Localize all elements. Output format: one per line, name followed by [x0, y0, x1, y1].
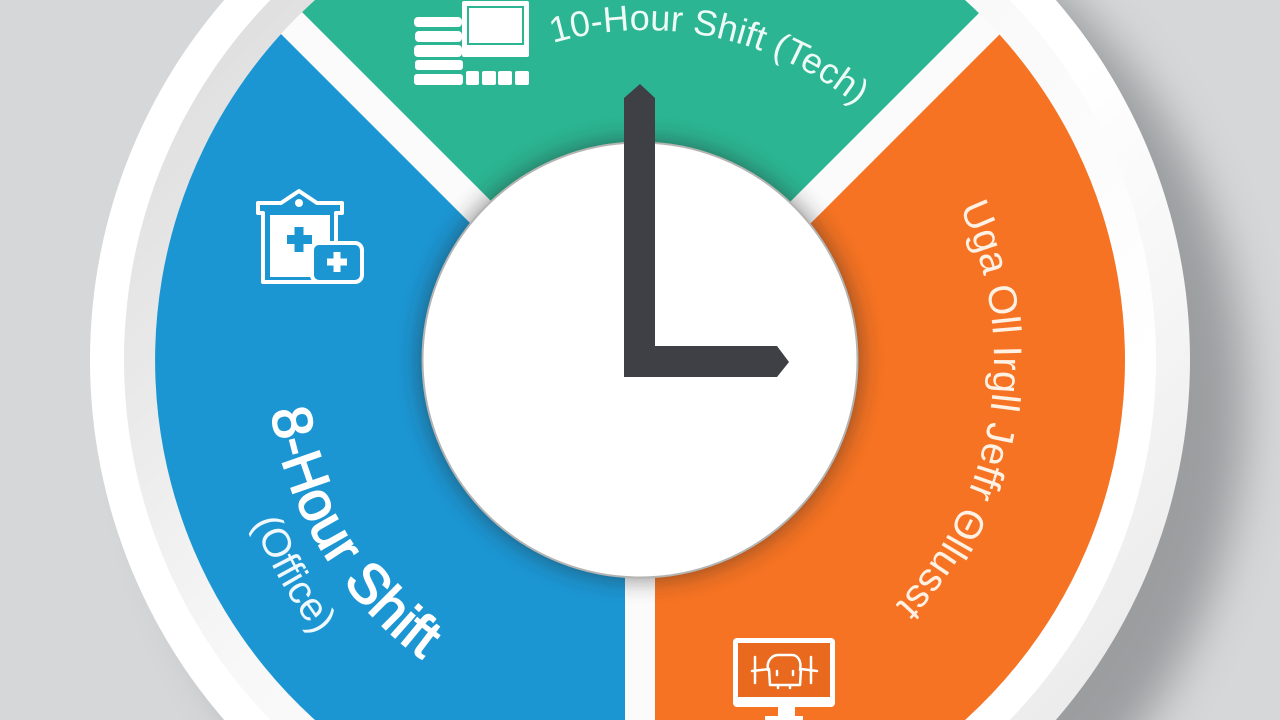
center disc shadow — [418, 138, 862, 582]
segment: blue office shift — [155, 34, 625, 720]
label: 10-hour shift tech: 10-Hour Shift (Tech) — [551, 6, 866, 106]
clock hands — [624, 84, 789, 377]
segment: orange hospital shift — [655, 34, 1125, 720]
icon: tech workstation — [414, 1, 529, 85]
segment: green tech shift — [302, 0, 979, 351]
label: garbled orange shift text: Uga Oll Irgll Jeffr Θllusst — [896, 199, 1022, 620]
label: 8-hour shift: 8-Hour Shift — [272, 407, 441, 660]
icon: hospital clipboard — [258, 191, 362, 282]
icon: monitor with armchair — [733, 638, 835, 720]
label: office: (Office) — [248, 518, 334, 633]
center clock face — [422, 142, 858, 578]
